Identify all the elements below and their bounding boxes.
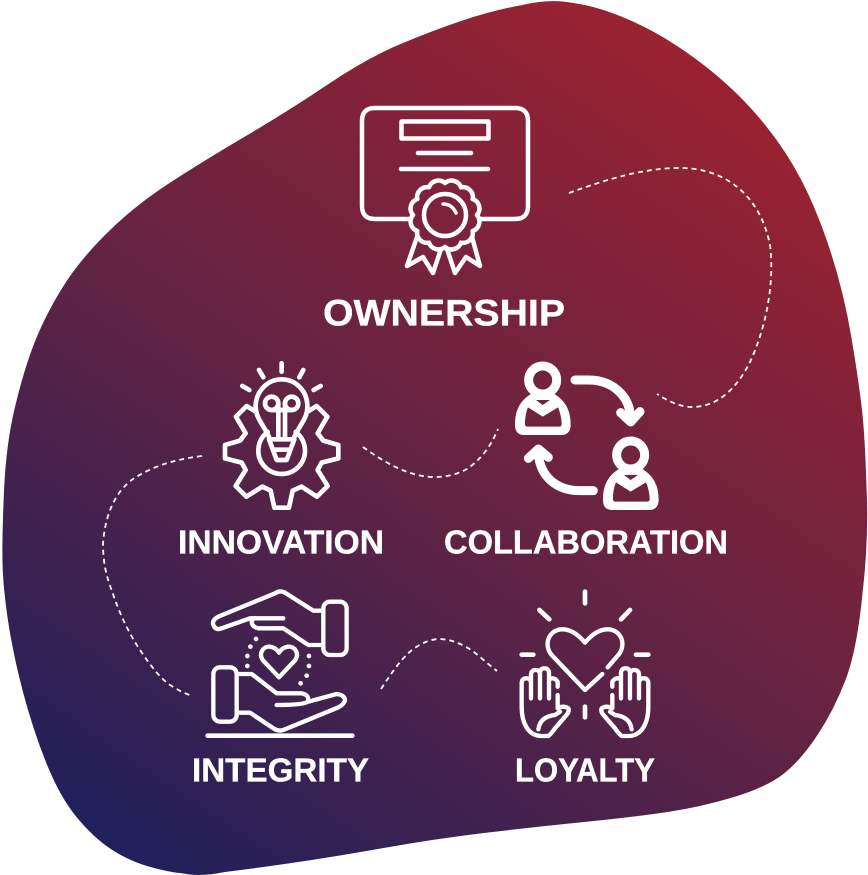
icon: collaboration people and arrows	[515, 366, 659, 510]
left hand	[522, 668, 569, 736]
dashed connector: ownership to collaboration	[569, 168, 771, 407]
icon: light bulb and gear	[225, 363, 338, 508]
circular arrows	[528, 380, 640, 491]
dashed connector: collaboration to innovation	[363, 429, 498, 477]
icon: hands with heart	[208, 591, 352, 736]
dashed connector: innovation to integrity	[103, 456, 202, 696]
icon: certificate	[362, 108, 528, 273]
label: ownership: OWNERSHIP	[323, 292, 565, 334]
label: collaboration: COLLABORATION	[444, 524, 728, 560]
icon: raised hands and heart	[522, 592, 648, 736]
label: integrity: INTEGRITY	[192, 752, 369, 788]
label: loyalty: LOYALTY	[515, 752, 655, 788]
right hand	[601, 668, 648, 736]
person one	[515, 366, 571, 435]
dashed connector: integrity to loyalty	[381, 639, 497, 689]
person two	[603, 441, 659, 510]
label: innovation: INNOVATION	[178, 524, 384, 560]
